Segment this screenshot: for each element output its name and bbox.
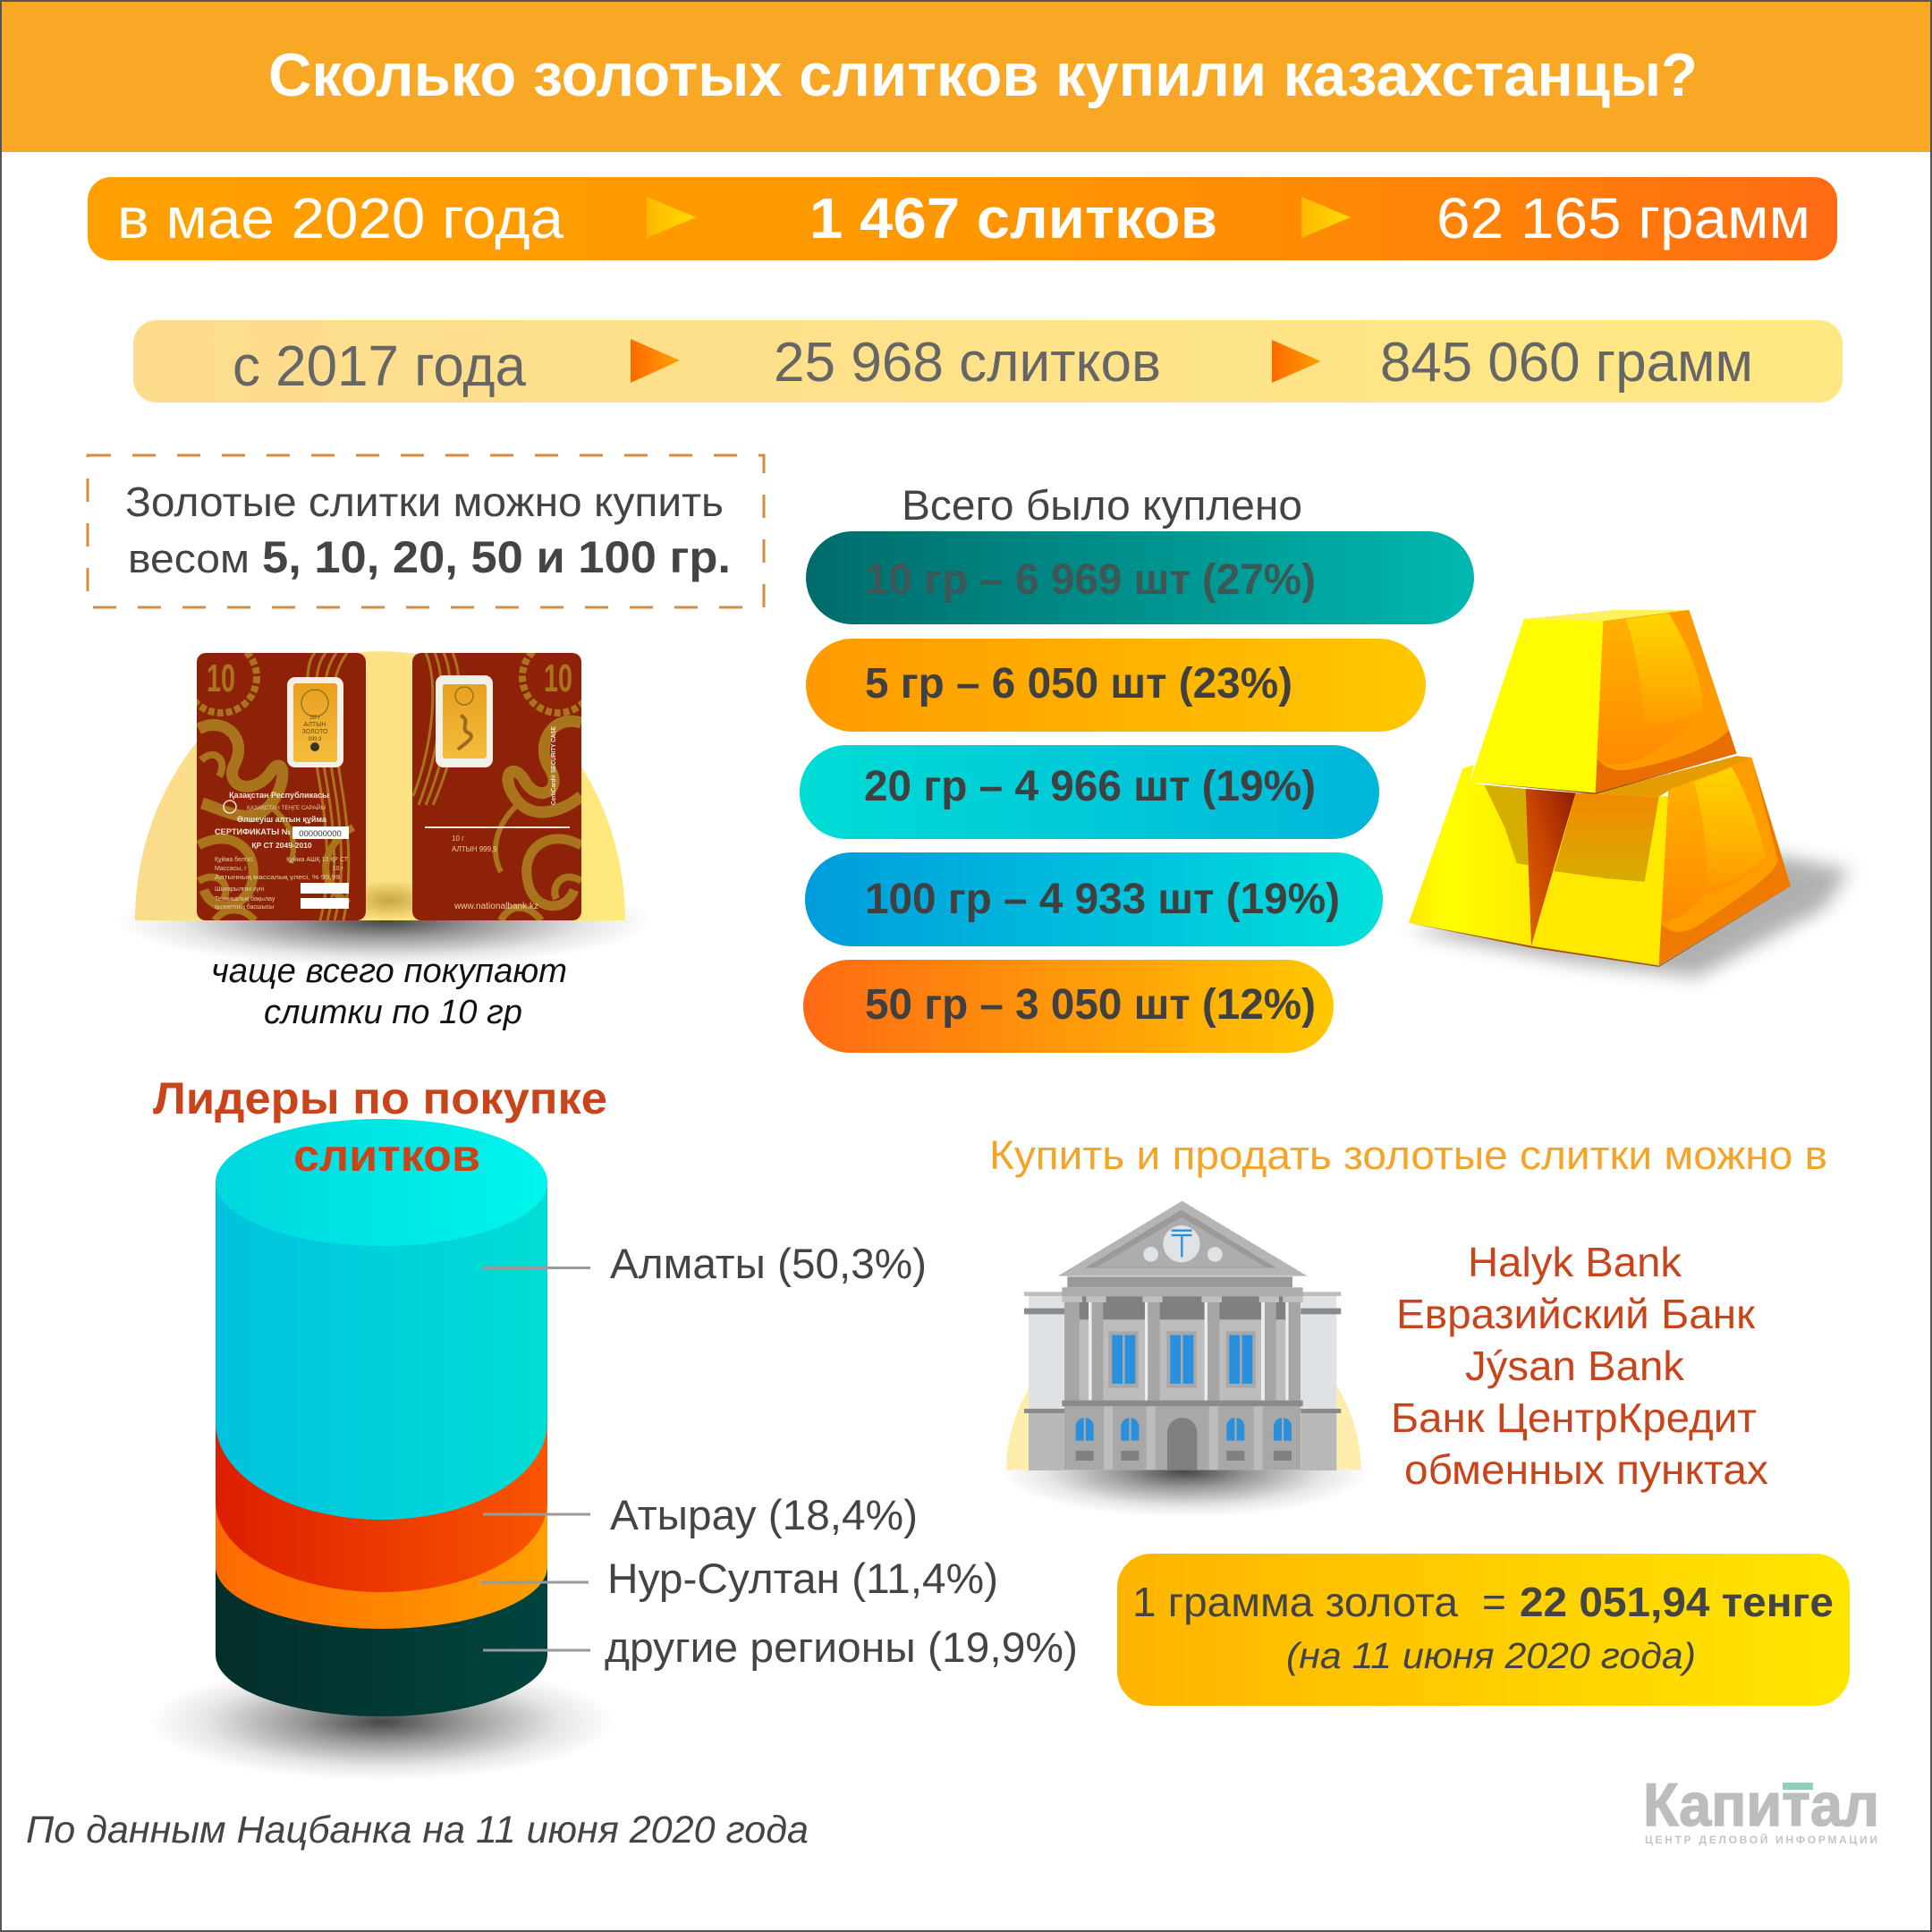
callout: gold price: 22 051,94 тенге — [1520, 1579, 1834, 1625]
card: front with certificate: ҚАЗАҚСТАН ТЕҢГЕ САРАЙЫ — [247, 803, 326, 811]
heading: total bought: Всего было куплено — [902, 481, 1302, 529]
panel: May 2020 bar: 62 165 грамм — [1436, 186, 1810, 250]
chart: regional leaders cylinder — [148, 1119, 616, 1781]
icon: certificate cards with gold bars — [135, 651, 631, 964]
heading: purchase leaders: слитков — [293, 1131, 480, 1181]
card: front with certificate: Техникалық бақылау — [215, 895, 275, 902]
list: banks: Банк ЦентрКредит — [1391, 1394, 1757, 1441]
title: Сколько золотых слитков купили казахстанцы? — [268, 41, 1698, 109]
callout: available weights — [88, 455, 764, 607]
list: banks — [1391, 1239, 1768, 1493]
pill: 100 g — [805, 852, 1383, 946]
card: front with certificate: қызметінің басшысы — [215, 903, 274, 911]
panel: since 2017 bar: 25 968 слитков — [774, 332, 1161, 394]
pill: 10 g — [806, 531, 1474, 624]
callout: available weights: весом — [128, 536, 250, 581]
source note: По данным Нацбанка на 11 июня 2020 года — [26, 1809, 809, 1852]
caption: most popular bar — [211, 953, 567, 1031]
heading: purchase leaders — [153, 1073, 607, 1181]
chart labels: regions: Нур-Султан (11,4%) — [607, 1555, 998, 1602]
callout: gold price — [1117, 1554, 1850, 1706]
card: back with website: АЛТЫН 999,9 — [452, 845, 497, 853]
chart labels: regions: другие регионы (19,9%) — [605, 1623, 1078, 1671]
pill: 5 g — [806, 639, 1426, 732]
card: front with certificate: АЛТЫН — [304, 722, 326, 728]
card: front with certificate: Өлшеуіш алтын құйма — [237, 815, 327, 824]
pill: 50 g — [803, 960, 1334, 1053]
card: front with certificate: 10 г — [309, 715, 321, 721]
card: front with certificate: Массасы, г — [215, 866, 247, 872]
card: front with certificate: Қазақстан Республикасы — [229, 791, 329, 800]
header banner — [0, 0, 1932, 152]
card: front with certificate: Шығарылған күні — [215, 886, 265, 893]
logo: Kapital: ЦЕНТР ДЕЛОВОЙ ИНФОРМАЦИИ — [1645, 1833, 1877, 1846]
chart labels: regions: Алматы (50,3%) — [610, 1240, 927, 1287]
panel: since 2017 bar: с 2017 года — [233, 334, 526, 398]
callout: gold price: = — [1482, 1579, 1506, 1625]
icon: bank building — [1000, 1201, 1370, 1518]
chart labels: regions — [605, 1240, 1078, 1671]
panel: May 2020 bar: 1 467 слитков — [809, 186, 1217, 250]
pill: 20 g: 20 гр – 4 966 шт (19%) — [864, 763, 1316, 810]
pill: 5 g: 5 гр – 6 050 шт (23%) — [865, 660, 1292, 708]
heading: purchase leaders: Лидеры по покупке — [153, 1073, 607, 1123]
panel: since 2017 bar: 845 060 грамм — [1380, 332, 1753, 394]
card: back with website: 10 г — [452, 835, 464, 843]
chart labels: regions: Атырау (18,4%) — [610, 1491, 918, 1538]
callout: gold price: (на 11 июня 2020 года) — [1286, 1635, 1696, 1676]
callout: gold price: 1 грамма золота — [1132, 1579, 1458, 1625]
pill: 20 g — [800, 745, 1379, 839]
callout: available weights: 5, 10, 20, 50 и 100 гр. — [262, 532, 731, 582]
card: front with certificate: 000000000 — [299, 829, 342, 839]
caption: most popular bar: чаще всего покупают — [211, 953, 567, 990]
leader lines — [481, 1268, 590, 1650]
list: banks: Евразийский Банк — [1396, 1291, 1756, 1337]
card: front with certificate: Алтынның массалық үлесі, % 99,99 — [215, 874, 340, 881]
card: front with certificate: Құйма АШҚ 10 ҚР СТ — [286, 856, 349, 863]
logo: Kapital: Капитал — [1643, 1771, 1879, 1839]
card: back with website: www.nationalbank.kz — [453, 902, 538, 911]
card: front with certificate: Құйма белгісі — [215, 856, 253, 863]
card: front with certificate: ЗОЛОТО — [302, 729, 328, 735]
card: back with website — [412, 653, 581, 920]
callout: available weights: Золотые слитки можно купить — [125, 479, 724, 525]
card: front with certificate: 999,9 — [308, 737, 322, 742]
list: banks: Jýsan Bank — [1465, 1343, 1685, 1389]
list: banks: обменных пунктах — [1404, 1446, 1768, 1493]
card: front with certificate — [197, 653, 366, 920]
card: back with website: 10 — [544, 657, 572, 700]
card: back with website: CertiCard® SECURITY CASE — [549, 726, 557, 805]
heading: where to buy: Купить и продать золотые слитки можно в — [989, 1132, 1827, 1178]
card: front with certificate: 10 — [207, 657, 235, 700]
pill: 50 g: 50 гр – 3 050 шт (12%) — [865, 981, 1316, 1029]
pill: 100 g: 100 гр – 4 933 шт (19%) — [865, 876, 1340, 923]
card: front with certificate: ҚР СТ 2049-2010 — [251, 841, 312, 850]
card: front with certificate: СЕРТИФИКАТЫ № — [215, 827, 291, 836]
pill: 10 g: 10 гр – 6 969 шт (27%) — [865, 556, 1316, 604]
panel: May 2020 bar: в мае 2020 года — [117, 186, 564, 250]
icon: stacked gold ingots — [1409, 610, 1850, 977]
caption: most popular bar: слитки по 10 гр — [264, 994, 522, 1031]
panel: May 2020 bar — [88, 177, 1837, 260]
panel: since 2017 bar — [133, 320, 1843, 402]
list: banks: Halyk Bank — [1468, 1239, 1682, 1285]
card: front with certificate: 10 г — [333, 866, 343, 872]
